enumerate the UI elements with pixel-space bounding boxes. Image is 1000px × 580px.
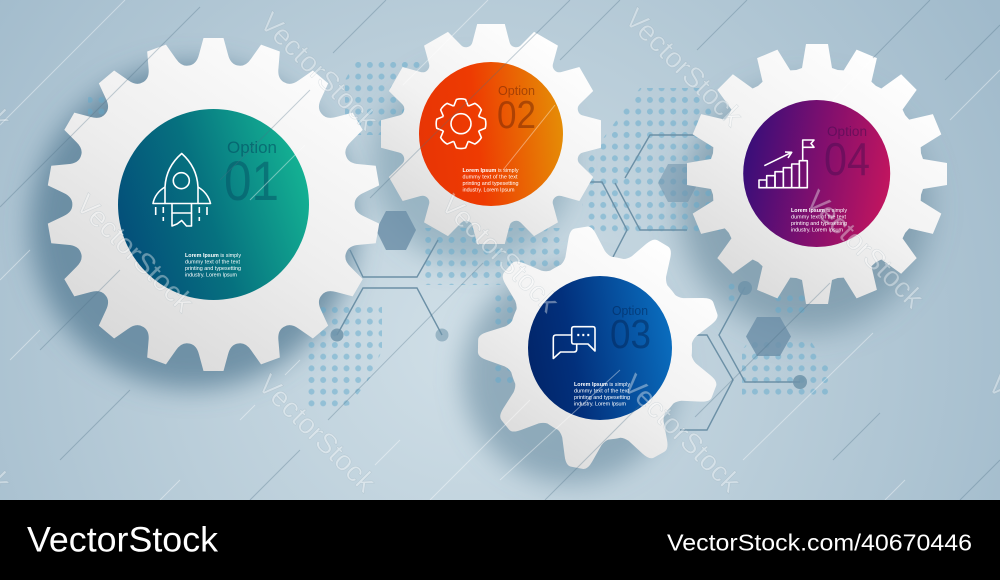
- number 03: 03: [610, 311, 651, 357]
- gear body 02: [378, 20, 604, 248]
- watermarks: VectorStock: [616, 369, 747, 499]
- watermarks: VectorStock: [799, 185, 930, 315]
- watermarks: VectorStock: [434, 189, 565, 319]
- circuit node dots: [330, 281, 807, 389]
- watermarks: VectorStock: [618, 3, 749, 133]
- number 02: 02: [497, 94, 536, 137]
- body text 03: industry. Lorem Ipsum: [574, 402, 626, 408]
- filled hexagons: [376, 164, 791, 356]
- panel: option 02 gear: [378, 20, 604, 248]
- gear body 03: [474, 224, 721, 473]
- hexagon circuit lines: [337, 135, 800, 430]
- watermarks: VectorStock: [253, 7, 384, 137]
- panel: option 01 gear: [45, 35, 382, 375]
- body text 01: industry. Lorem Ipsum: [185, 272, 238, 278]
- body text 03: dummy text of the text: [574, 388, 630, 394]
- body text 03: Lorem Ipsum is simply: [574, 382, 630, 388]
- badge circle 04: [743, 100, 890, 247]
- gear body 04: [684, 40, 950, 308]
- body text 04: industry. Lorem Ipsum: [791, 228, 844, 234]
- footer brand: VectorStock: [27, 520, 219, 560]
- badge circle 03: [528, 276, 672, 420]
- badge circle 02: [419, 62, 563, 206]
- panel: option 04 gear: [684, 40, 950, 308]
- watermarks: VectorStock: [69, 189, 200, 319]
- icon: cog: [436, 99, 486, 149]
- body text 02: industry. Lorem Ipsum: [462, 188, 515, 194]
- icon: rocket: [153, 154, 210, 226]
- number 04: 04: [824, 133, 870, 185]
- badge circle 01: [118, 109, 309, 300]
- body text 04: dummy text of the text: [791, 214, 846, 220]
- footer image id: VectorStock.com/40670446: [667, 530, 972, 556]
- footer bar: [0, 500, 1000, 580]
- option label 01: Option: [227, 138, 277, 157]
- number 01: 01: [224, 149, 279, 212]
- body text 01: Lorem Ipsum is simply: [185, 253, 241, 259]
- body text 02: Lorem Ipsum is simply: [462, 168, 519, 174]
- watermarks: VectorStock: [251, 369, 382, 499]
- icon: growth chart with flag: [759, 140, 814, 188]
- body text 02: dummy text of the text: [462, 174, 518, 180]
- option label 04: Option: [827, 124, 867, 139]
- body text 01: dummy text of the text: [185, 260, 240, 266]
- body text 04: printing and typesetting: [791, 221, 847, 227]
- option label 03: Option: [612, 304, 648, 318]
- body text 01: printing and typesetting: [185, 266, 241, 272]
- body text 02: printing and typesetting: [462, 181, 518, 187]
- option label 02: Option: [498, 83, 535, 98]
- gear drop shadows: [30, 63, 930, 483]
- gear body 01: [45, 35, 382, 375]
- halftone dot world map: [88, 62, 830, 410]
- body text 04: Lorem Ipsum is simply: [791, 208, 847, 214]
- icon: chat bubbles: [553, 327, 595, 358]
- panel: option 03 gear: [474, 224, 721, 473]
- body text 03: printing and typesetting: [574, 395, 630, 401]
